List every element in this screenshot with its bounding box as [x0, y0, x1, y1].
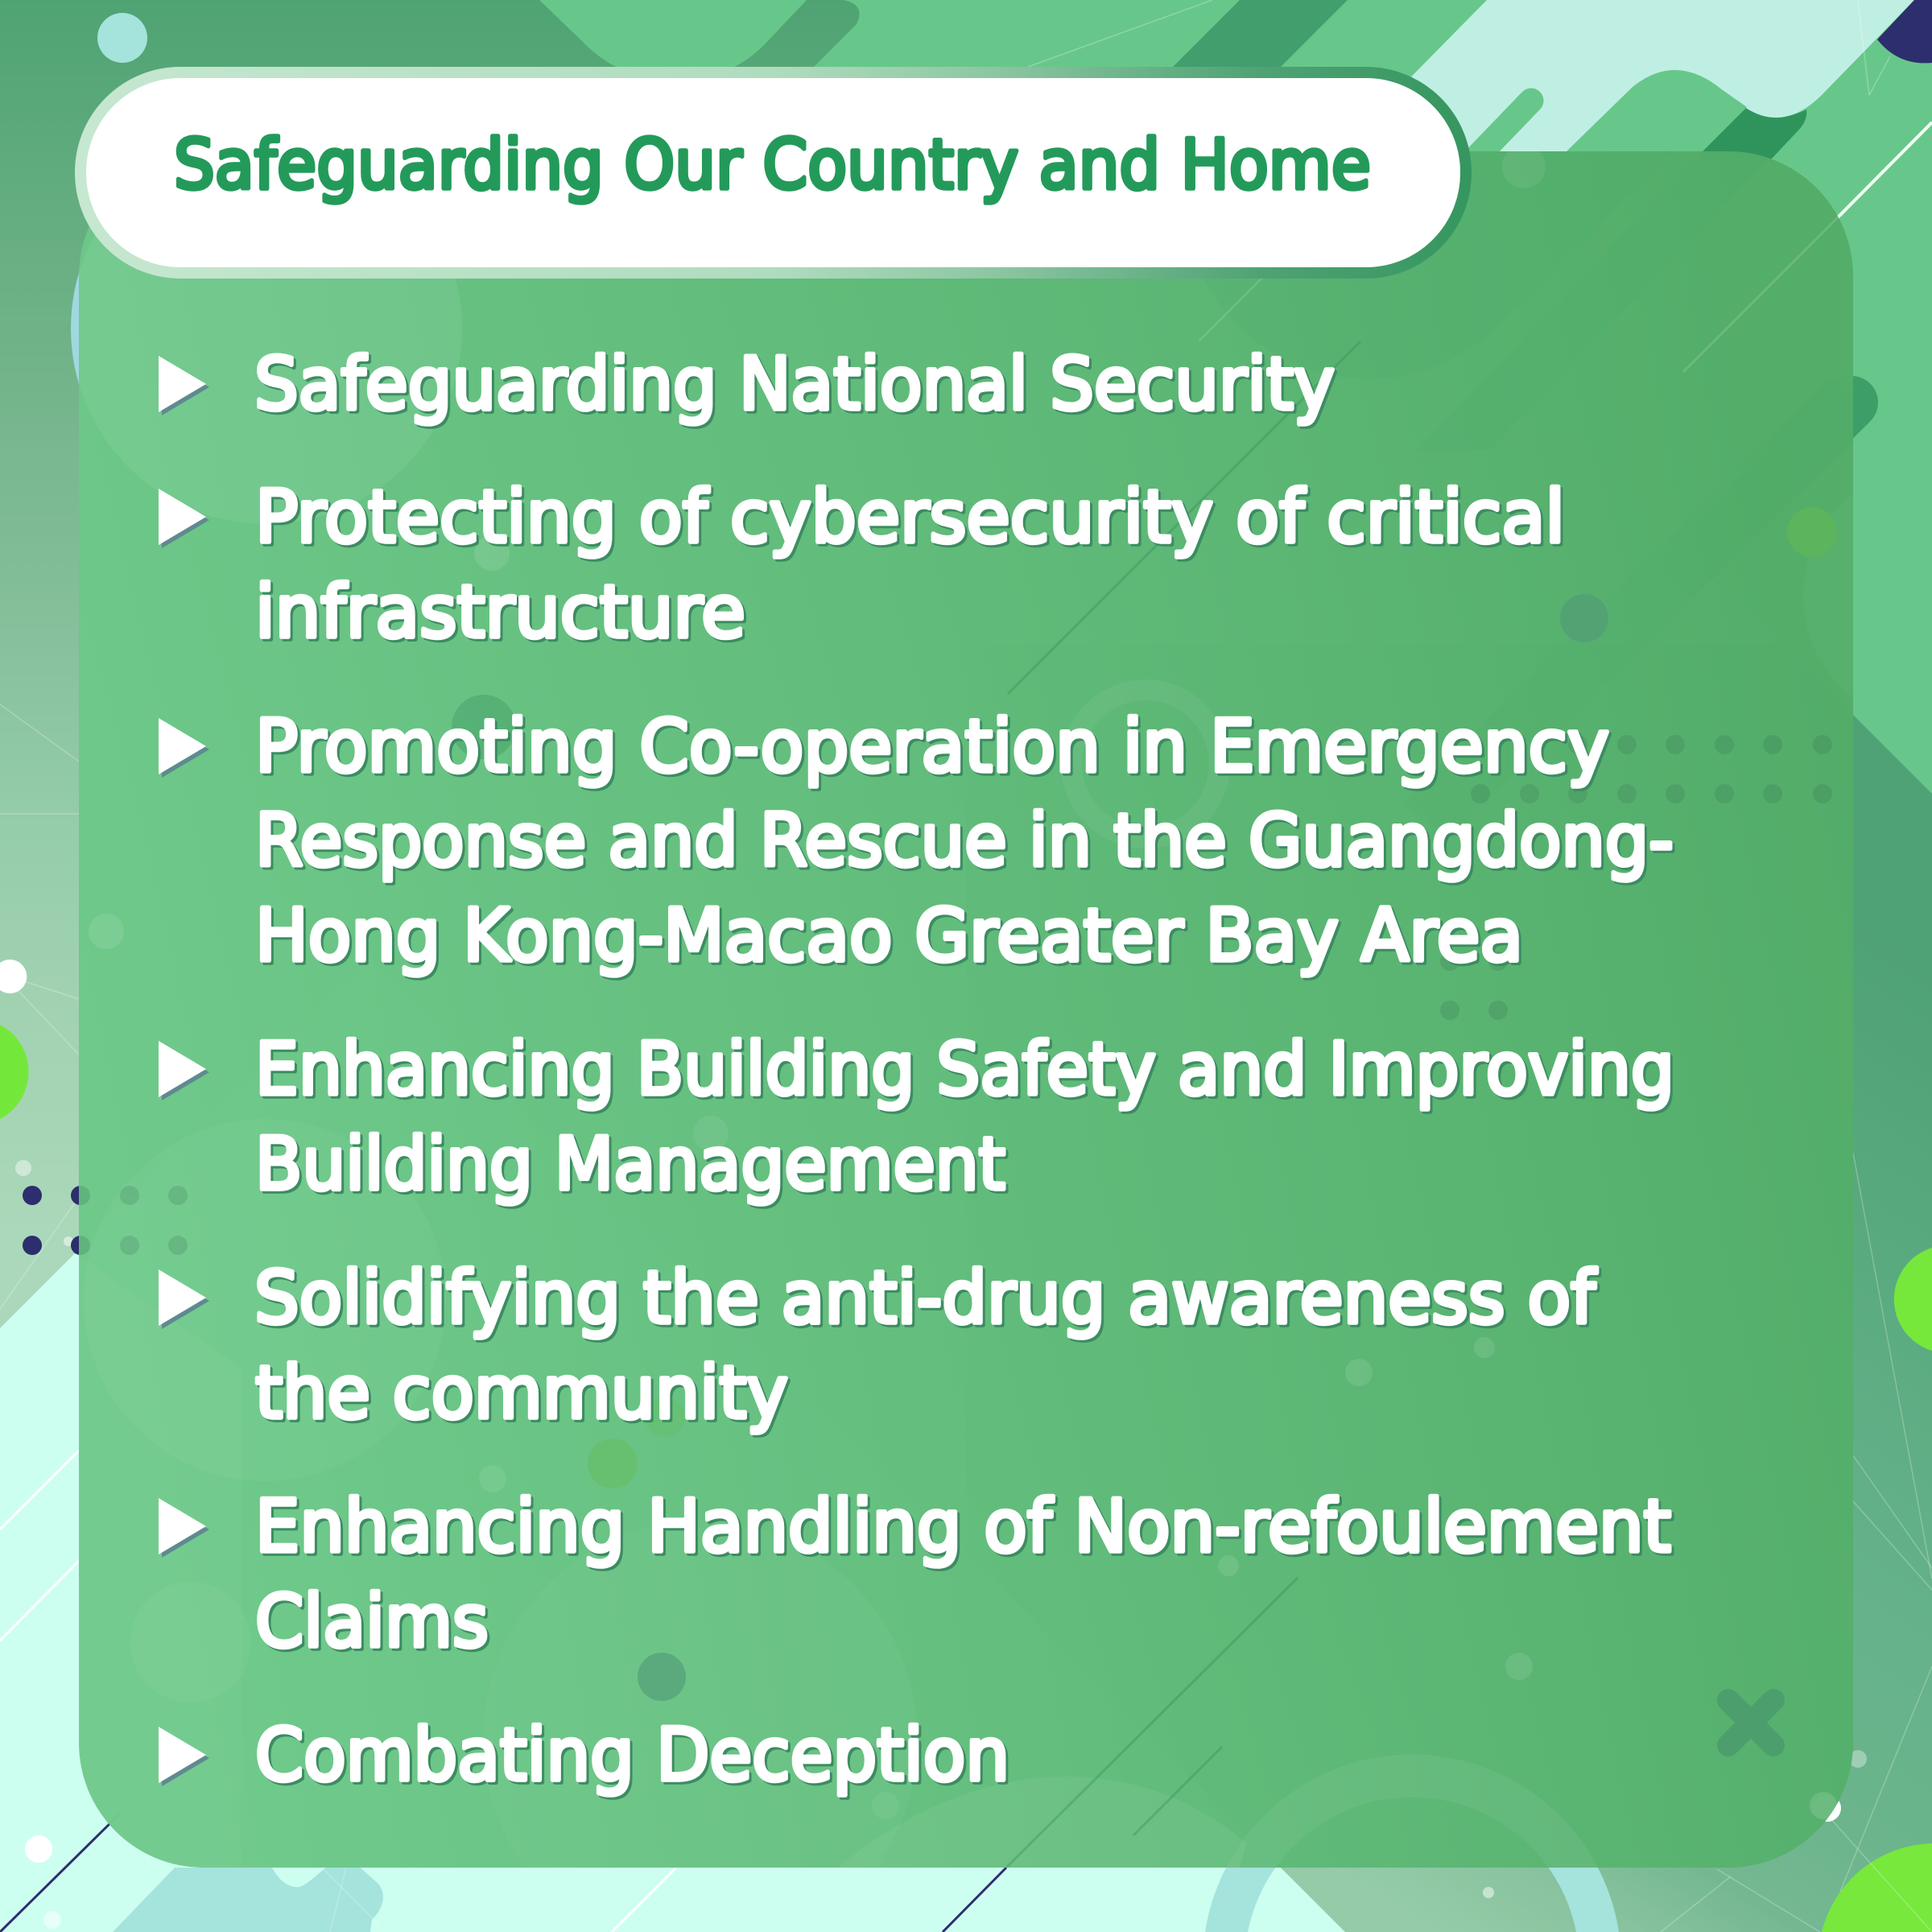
- item: cybersecurity: infrastructure: [255, 570, 745, 654]
- bullet list: [159, 342, 1674, 1798]
- texture: green circles: [588, 507, 1837, 1488]
- item: emergency response: Response and Rescue in the Guangdong-: [255, 799, 1674, 883]
- item: emergency response: Promoting Co-operation in Emergency: [255, 704, 1609, 789]
- texture: right-hand dark band: [1401, 378, 1876, 837]
- background: green rounded bar: [1469, 101, 1531, 165]
- background: small light circles: [15, 1160, 1867, 1929]
- item: building safety: Enhancing Building Safety and Improving: [255, 1027, 1674, 1112]
- texture: pale white line continuation: [1683, 217, 1838, 372]
- item: non-refoulement: Claims: [255, 1579, 489, 1664]
- item: anti-drug: Solidifying the anti-drug awareness of: [254, 1256, 1597, 1340]
- background: dark bar under mint lobe: [1703, 107, 1806, 159]
- background: bright green circle bottom right: [1822, 1843, 1932, 1932]
- title text: Safeguarding Our Country and Home: [174, 125, 1371, 205]
- background: green blob: [1567, 70, 1747, 151]
- item: anti-drug: [159, 1256, 1597, 1435]
- item: deception: Combating Deception: [255, 1713, 1009, 1798]
- background: navy blob top right: [1877, 0, 1932, 63]
- background: diagonal lines on mint: [0, 1451, 1006, 1932]
- background: mint shape top right: [1328, 0, 1914, 161]
- background: bright green circle right: [1894, 1248, 1932, 1351]
- texture: faint diagonal lines: [1006, 341, 1360, 1868]
- background: dark diagonal stripe: [1079, 0, 1348, 161]
- item: emergency response: Hong Kong-Macao Greater Bay Area: [255, 894, 1523, 978]
- texture: pale diagonal line: [1199, 277, 1263, 341]
- background: lower right gradient field: [966, 644, 1932, 1932]
- background: white circle left: [0, 960, 27, 993]
- background: bright green circle left: [0, 1025, 28, 1119]
- background: white diagonal line: [1838, 122, 1932, 217]
- item: national security: Safeguarding National Security: [254, 342, 1335, 427]
- background: teal circle top left: [97, 13, 147, 63]
- background: teal ring bottom: [1205, 1754, 1619, 1932]
- item: building safety: [159, 1027, 1674, 1207]
- pill shape: [80, 72, 1466, 273]
- background: dark bar right of panel: [1690, 402, 1852, 564]
- title pill: [80, 72, 1466, 273]
- texture: dark bar continuation: [1417, 151, 1775, 451]
- background: blue circle behind panel: [71, 133, 462, 524]
- background: light green field top right: [644, 0, 1932, 794]
- background: navy dots left: [23, 1186, 90, 1255]
- item: non-refoulement: [159, 1484, 1671, 1664]
- item: building safety: Building Management: [255, 1122, 1005, 1207]
- texture: big dark rounded band: [1183, 151, 1673, 379]
- background: teal blob bottom left: [113, 1852, 383, 1932]
- texture: cross mark: [1728, 1700, 1773, 1745]
- texture: light ring: [1071, 690, 1220, 838]
- item: emergency response: [159, 704, 1674, 978]
- item: cybersecurity: [159, 475, 1565, 654]
- item: cybersecurity: Protecting of cybersecurity of critical: [255, 475, 1565, 559]
- texture: dark circles: [452, 594, 1608, 1701]
- item: anti-drug: the community: [255, 1351, 788, 1435]
- item: non-refoulement: Enhancing Handling of Non-refoulement: [255, 1484, 1671, 1569]
- texture: dim dot grids: [71, 735, 1832, 1255]
- background: light green blob top: [539, 0, 807, 80]
